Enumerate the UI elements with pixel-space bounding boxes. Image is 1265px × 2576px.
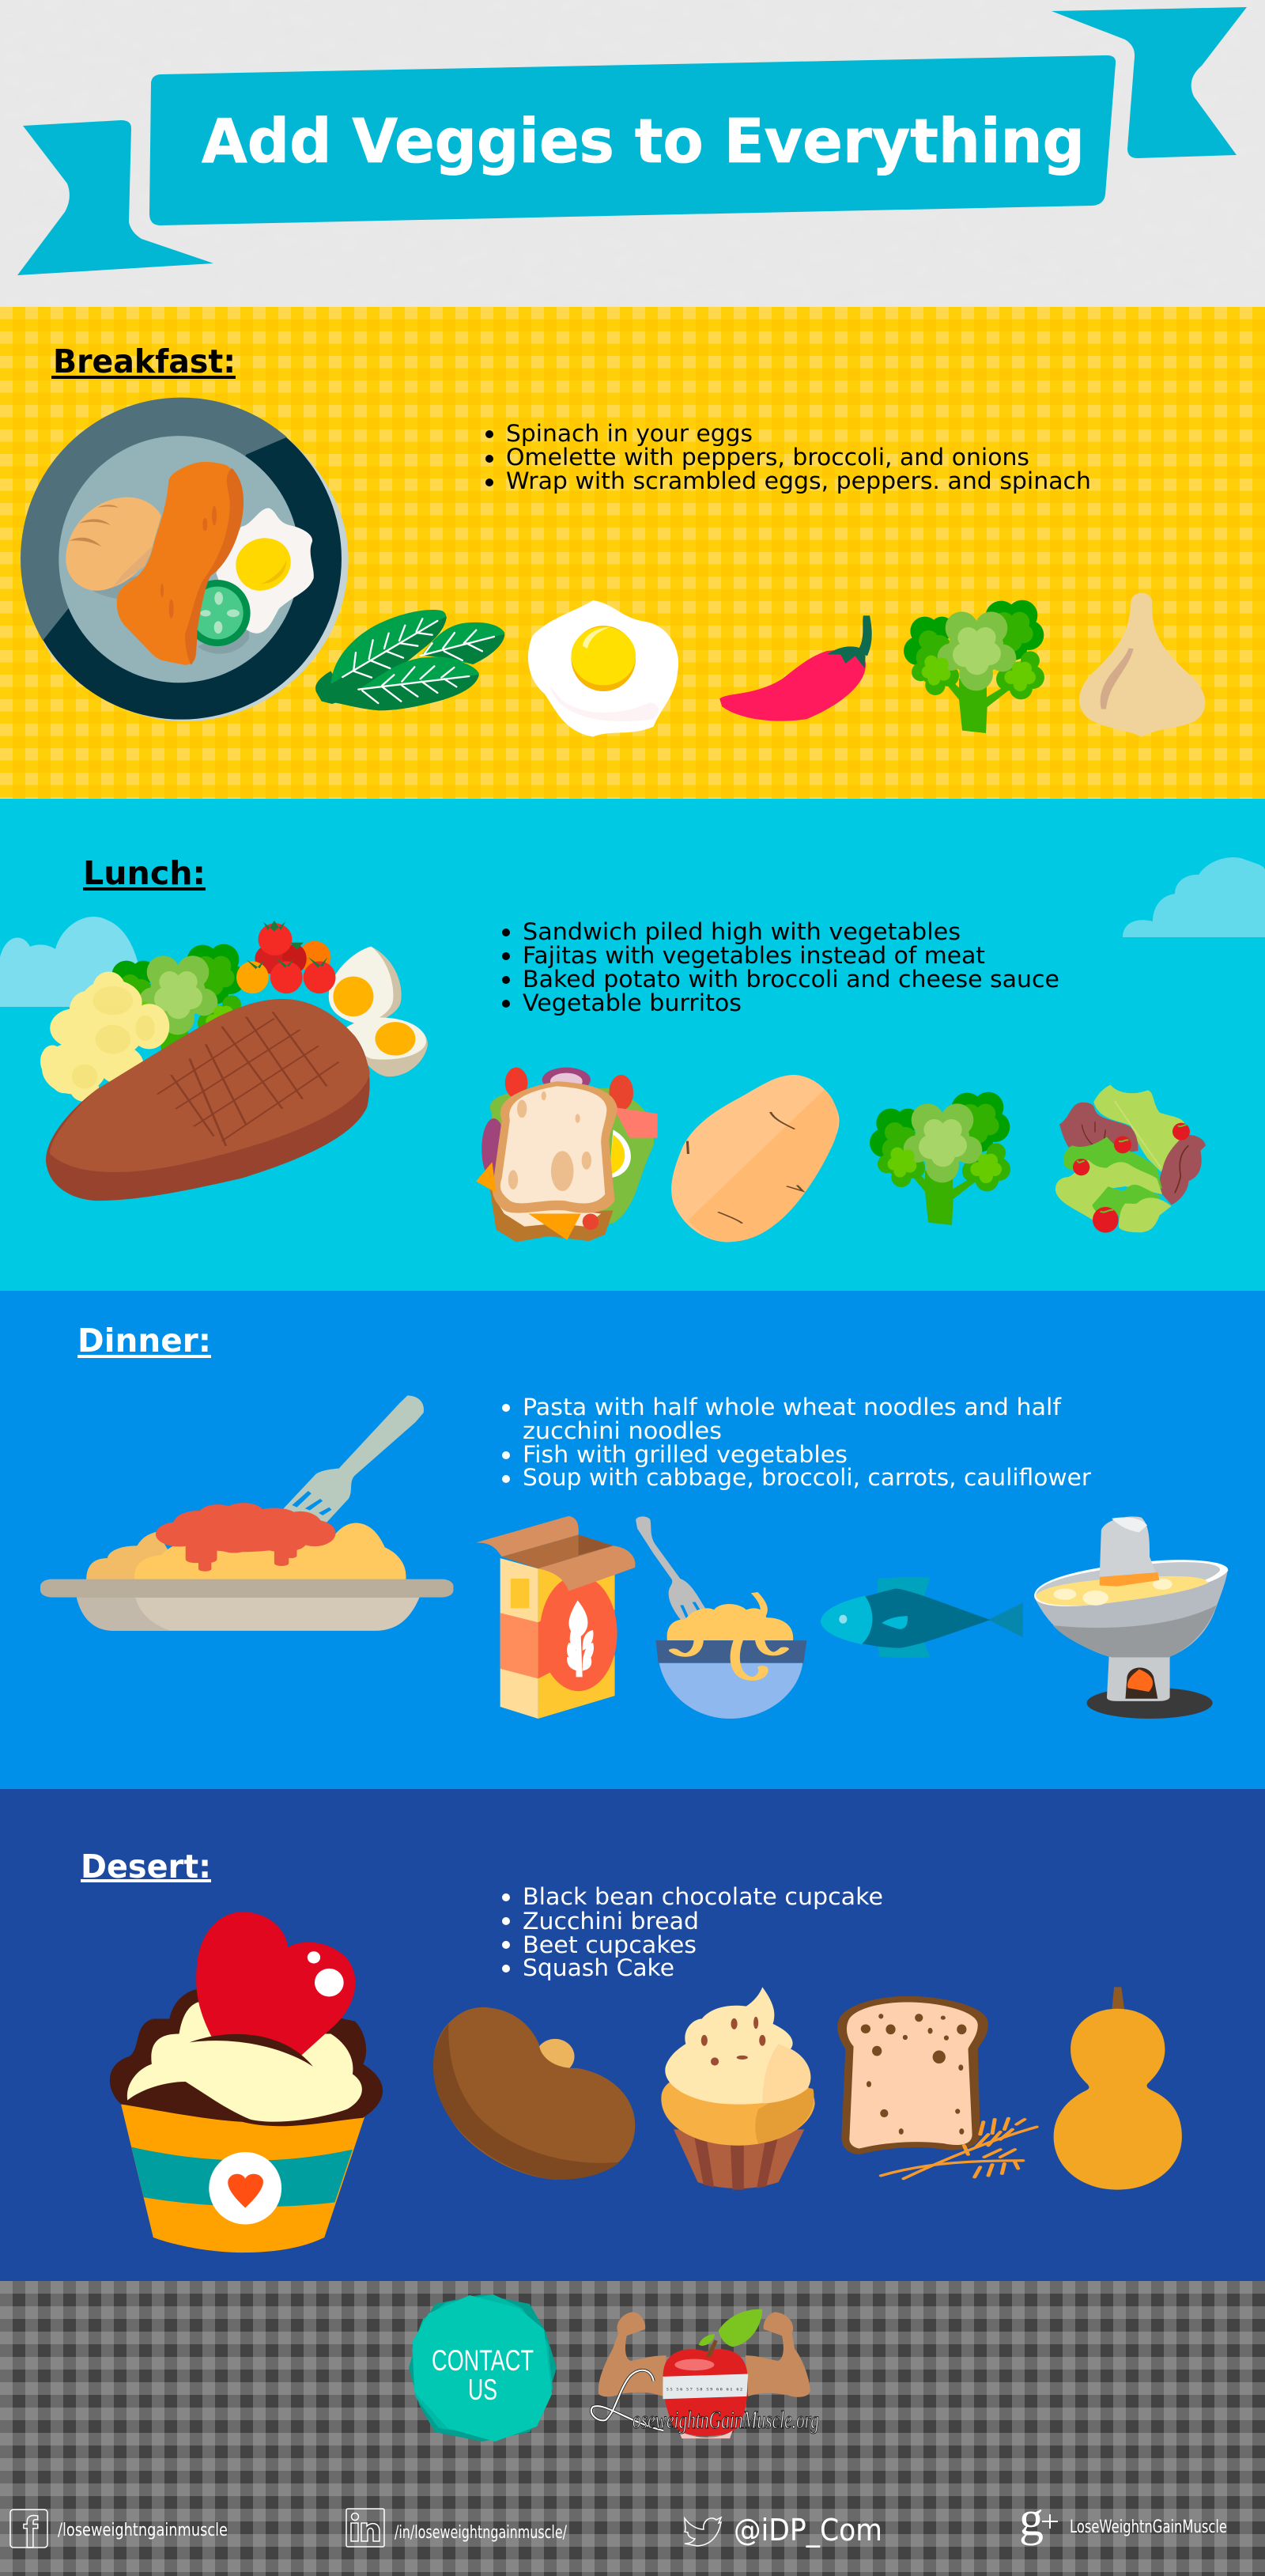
icon: google plus — [1019, 2492, 1058, 2546]
icon: zucchini bread slice — [837, 1996, 1037, 2179]
icon: bean — [433, 2007, 635, 2180]
list: desert ideas: Squash Cake — [523, 1954, 674, 1981]
icon: fried egg — [528, 600, 678, 736]
heading: lunch: Lunch: — [83, 854, 206, 892]
right leaf — [421, 622, 504, 664]
bread roll — [66, 497, 161, 591]
broccoli side — [105, 944, 246, 1077]
icon: noodle bowl with fork — [636, 1516, 806, 1719]
egg on plate — [216, 508, 314, 634]
icon: broccoli — [904, 600, 1044, 733]
badge: contact us: US — [468, 2374, 497, 2406]
apple — [663, 2349, 748, 2436]
list: dinner ideas: Soup with cabbage, broccoli, carrots, cauliflower — [523, 1464, 1091, 1491]
icon: cupcake — [661, 1987, 815, 2190]
icon: potato — [671, 1075, 839, 1242]
list: desert ideas: Zucchini bread — [523, 1908, 699, 1935]
icon: breakfast plate — [21, 398, 349, 721]
icon: google plus: g — [1019, 2492, 1044, 2546]
icon: squash — [1054, 1987, 1182, 2190]
list: lunch ideas — [502, 918, 1059, 1016]
list: dinner ideas: Fish with grilled vegetables — [523, 1441, 848, 1468]
cloud left — [0, 917, 144, 1007]
top leaf — [315, 671, 348, 704]
icon: facebook — [10, 2507, 47, 2557]
bottom leaf — [358, 657, 479, 690]
list: desert ideas: Black bean chocolate cupcake — [523, 1883, 883, 1910]
list: dinner ideas: Pasta with half whole wheat noodles and half — [523, 1394, 1062, 1420]
icon: spinach — [315, 610, 504, 710]
list: desert ideas: Beet cupcakes — [523, 1931, 697, 1958]
heading: breakfast: Breakfast: — [53, 342, 236, 380]
list: lunch ideas: Vegetable burritos — [523, 989, 742, 1016]
icon: fish — [821, 1577, 1023, 1658]
logo: muscular apple: 55 56 57 58 59 60 61 62 — [666, 2388, 742, 2392]
tomato sauce — [156, 1503, 335, 1572]
icon: broccoli — [870, 1092, 1010, 1225]
ribbon main band — [149, 55, 1116, 225]
text: linkedin handle: /in/loseweightngainmuscle/ — [395, 2523, 567, 2543]
icon: sandwich — [476, 1068, 658, 1242]
icon: salad — [1055, 1085, 1206, 1233]
list: dinner ideas — [502, 1394, 1091, 1491]
logo: muscular apple: oseweightnGainMuscle.org — [632, 2405, 819, 2434]
script L — [591, 2370, 663, 2430]
badge: contact us — [409, 2294, 557, 2442]
list: lunch ideas: Fajitas with vegetables instead of meat — [523, 942, 985, 969]
list: breakfast ideas: Omelette with peppers, broccoli, and onions — [506, 444, 1029, 471]
icon: chili pepper — [719, 615, 872, 721]
background: paper header — [0, 0, 1265, 307]
title: Add Veggies to Everything — [202, 107, 1085, 177]
ribbon left tail — [17, 120, 213, 275]
salmon fillet — [117, 462, 244, 665]
icon: pasta box — [476, 1516, 636, 1719]
steak — [46, 999, 370, 1201]
list: lunch ideas: Baked potato with broccoli and cheese sauce — [523, 966, 1059, 993]
icon: pasta plate with fork — [40, 1396, 453, 1631]
list: lunch ideas: Sandwich piled high with vegetables — [523, 918, 961, 945]
icon: facebook: f — [23, 2507, 38, 2557]
badge: contact us: CONTACT — [432, 2344, 534, 2377]
ribbon right tail — [1052, 7, 1247, 158]
icon: heart cupcake — [110, 1912, 383, 2253]
icon: linkedin — [346, 2509, 384, 2547]
heading: dinner: Dinner: — [77, 1322, 211, 1360]
cloud right — [1123, 857, 1265, 937]
wheat — [881, 2118, 1037, 2179]
text: facebook handle: /loseweightngainmuscle — [58, 2521, 228, 2540]
arms — [599, 2312, 666, 2396]
icon: soup pot — [1034, 1517, 1228, 1719]
eggs and tomatoes and cauliflower — [40, 921, 428, 1201]
list: breakfast ideas: Wrap with scrambled eggs, peppers. and spinach — [506, 467, 1091, 494]
panel: dinner — [0, 1291, 1265, 1789]
list: breakfast ideas — [485, 420, 1091, 494]
title ribbon banner — [17, 7, 1247, 275]
icon: twitter — [685, 2517, 721, 2546]
icon: garlic — [1079, 593, 1205, 736]
leaf and stem — [706, 2340, 718, 2358]
icon: steak meal — [40, 921, 428, 1201]
heading: desert: Desert: — [81, 1848, 211, 1886]
tape — [663, 2374, 748, 2399]
panel: desert — [0, 1789, 1265, 2281]
cucumber — [184, 580, 251, 646]
panel: footer — [0, 2281, 1265, 2576]
panel: breakfast — [0, 307, 1265, 799]
logo: muscular apple — [591, 2309, 819, 2438]
list: dinner ideas: zucchini noodles — [523, 1417, 722, 1444]
text: twitter handle: @iDP_Com — [734, 2513, 882, 2548]
panel: lunch — [0, 799, 1265, 1291]
list: desert ideas — [502, 1883, 883, 1981]
list: breakfast ideas: Spinach in your eggs — [506, 420, 753, 447]
